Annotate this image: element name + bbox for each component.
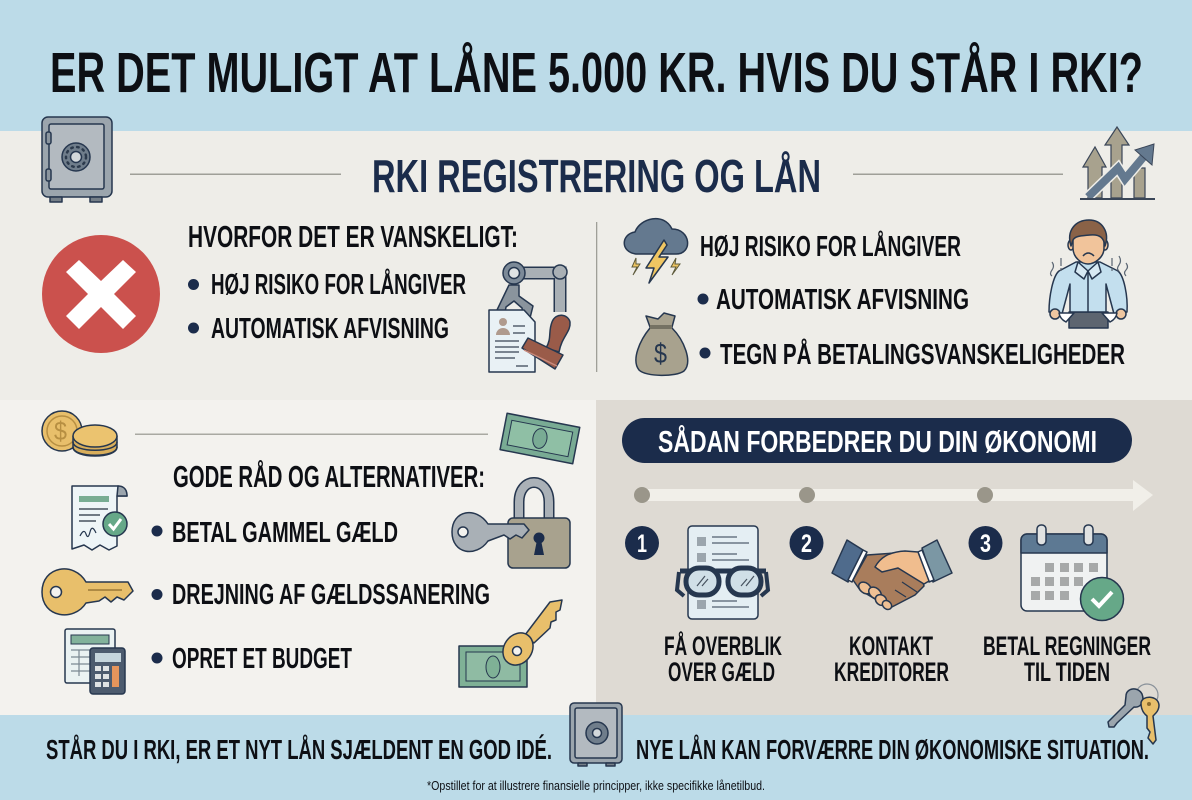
bullet list: HØJ RISIKO FOR LÅNGIVER (211, 268, 466, 301)
panel: sådan forbedrer du din økonomi (622, 418, 1153, 687)
bullet list: råd: BETAL GAMMEL GÆLD (172, 517, 398, 549)
icon: money bag: $ (654, 338, 667, 369)
step 2: KREDITORER (834, 657, 949, 687)
icon: money bag (636, 313, 688, 375)
right list: HØJ RISIKO FOR LÅNGIVER (700, 230, 961, 263)
icon: man with empty pockets (1049, 220, 1128, 328)
icon: robot arm with document and stamp (489, 262, 570, 372)
title banner (0, 0, 1192, 131)
bullet list: råd (152, 517, 490, 675)
timeline arrow (634, 480, 1153, 511)
right list: AUTOMATISK AFVISNING (716, 284, 969, 316)
step 2 (790, 526, 952, 687)
step 2: 2 (801, 530, 812, 558)
icon: tilted banknote (500, 413, 580, 464)
right list (698, 230, 1125, 371)
icon: coins (42, 411, 117, 456)
icon: coins: $ (54, 416, 67, 446)
icon: calendar with check (1021, 525, 1124, 620)
heading: RKI REGISTRERING OG LÅN (372, 150, 821, 202)
icon: gold key (42, 569, 133, 615)
icon: red cross (42, 235, 160, 353)
step 1 (625, 526, 782, 687)
step 1: OVER GÆLD (668, 657, 775, 687)
panel: footer (0, 684, 1192, 800)
icon: small safe (570, 703, 622, 766)
panel: gode råd og alternativer (42, 411, 580, 694)
step 1: 1 (637, 530, 647, 558)
icon: calculator and spreadsheet (65, 629, 125, 694)
step 3 (968, 525, 1151, 687)
icon: receipt with check (72, 486, 127, 550)
label: FÅ OVERBLIK (664, 630, 782, 661)
bullet list: AUTOMATISK AFVISNING (211, 313, 449, 345)
footer message left: STÅR DU I RKI, ER ET NYT LÅN SJÆLDENT EN GOD IDÉ. (46, 734, 552, 765)
subheading: gode råd: GODE RÅD OG ALTERNATIVER: (173, 459, 485, 494)
bullet list (188, 268, 466, 345)
icon: keys (1108, 684, 1159, 744)
icon: safe (42, 117, 112, 202)
panel: RKI registrering og lån (42, 117, 1155, 375)
step 3: 3 (980, 530, 991, 558)
pill heading (622, 418, 1132, 463)
icon: padlock with key (452, 482, 570, 568)
icon: banknote with key (459, 600, 562, 687)
bullet list: råd: DREJNING AF GÆLDSSANERING (172, 579, 490, 611)
footnote: *Opstillet for at illustrere finansielle principper, ikke specifikke lånetilbud. (427, 778, 765, 793)
icon: document with glasses (677, 526, 768, 619)
icon: storm cloud (624, 219, 688, 283)
icon: handshake (832, 540, 952, 611)
subheading: hvorfor: HVORFOR DET ER VANSKELIGT: (188, 219, 518, 254)
icon: rising arrows (1080, 127, 1155, 200)
label: KONTAKT (849, 631, 933, 661)
step 3: TIL TIDEN (1024, 657, 1110, 687)
bullet list: råd: OPRET ET BUDGET (172, 643, 352, 675)
